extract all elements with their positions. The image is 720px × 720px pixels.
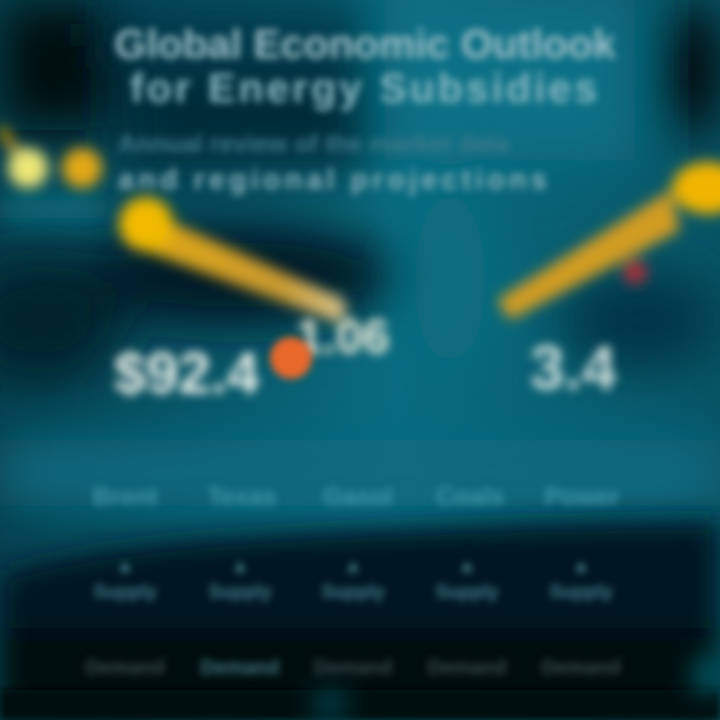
title: for Energy Subsidies — [130, 65, 600, 111]
table row 1: Supply — [435, 582, 499, 603]
table row 1: ▲ — [231, 556, 249, 577]
table row 2: Demand — [201, 657, 279, 679]
table row 2: Demand — [542, 657, 620, 679]
table row 1: ▲ — [572, 556, 590, 577]
big number: upper right of left group: 1.06 — [296, 311, 389, 364]
column labels: Texas — [207, 483, 277, 511]
column labels: Brent — [92, 483, 158, 511]
title: Global Economic Outlook — [114, 21, 616, 67]
column labels: Gasol — [323, 483, 393, 511]
table row 2: Demand — [86, 657, 164, 679]
subtitle — [114, 130, 551, 200]
subtitle: and regional projections — [118, 164, 551, 196]
table row 1: ▲ — [344, 556, 362, 577]
table row 2: Demand — [314, 657, 392, 679]
table row 1: Supply — [549, 582, 613, 603]
table row 2 — [83, 656, 622, 679]
table row 1: Supply — [321, 582, 385, 603]
table row 1: Supply — [208, 582, 272, 603]
table row 1 — [91, 556, 616, 604]
column labels: Power — [544, 483, 620, 511]
big number: left: $92.4 — [114, 341, 259, 406]
title — [110, 21, 619, 116]
table row 1: Supply — [93, 582, 157, 603]
table row 2: Demand — [428, 657, 506, 679]
column labels: Coals — [436, 483, 504, 511]
big number: right: 3.4 — [530, 334, 616, 403]
subtitle: Annual review of the market data — [118, 130, 510, 158]
table row 1: ▲ — [458, 556, 476, 577]
table row 1: ▲ — [116, 556, 134, 577]
column labels — [90, 483, 620, 511]
